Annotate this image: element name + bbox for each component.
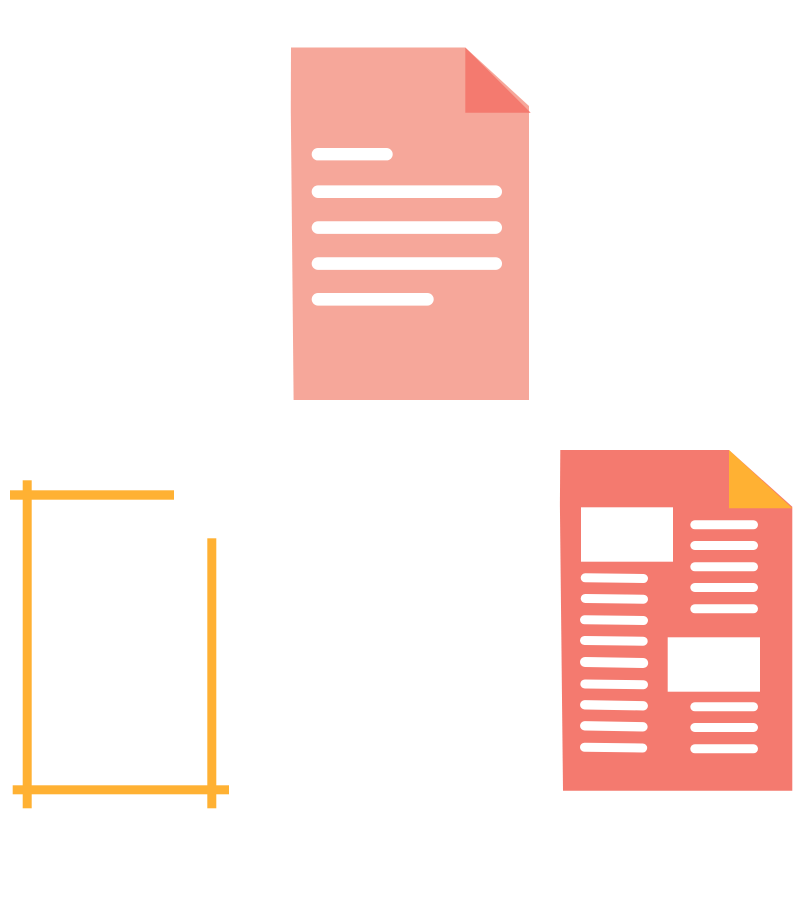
document page (291, 48, 529, 400)
folded corner (465, 48, 531, 113)
image block middle (668, 637, 760, 692)
icon: plain text document (291, 48, 531, 400)
icon: newspaper layout document (560, 450, 792, 791)
text lines (312, 148, 502, 306)
document page (560, 450, 792, 791)
icon: empty page outline frame (10, 480, 229, 808)
right column text lines (690, 520, 758, 753)
image block top (581, 507, 673, 562)
left column text lines (584, 578, 644, 748)
folded corner (729, 450, 792, 508)
